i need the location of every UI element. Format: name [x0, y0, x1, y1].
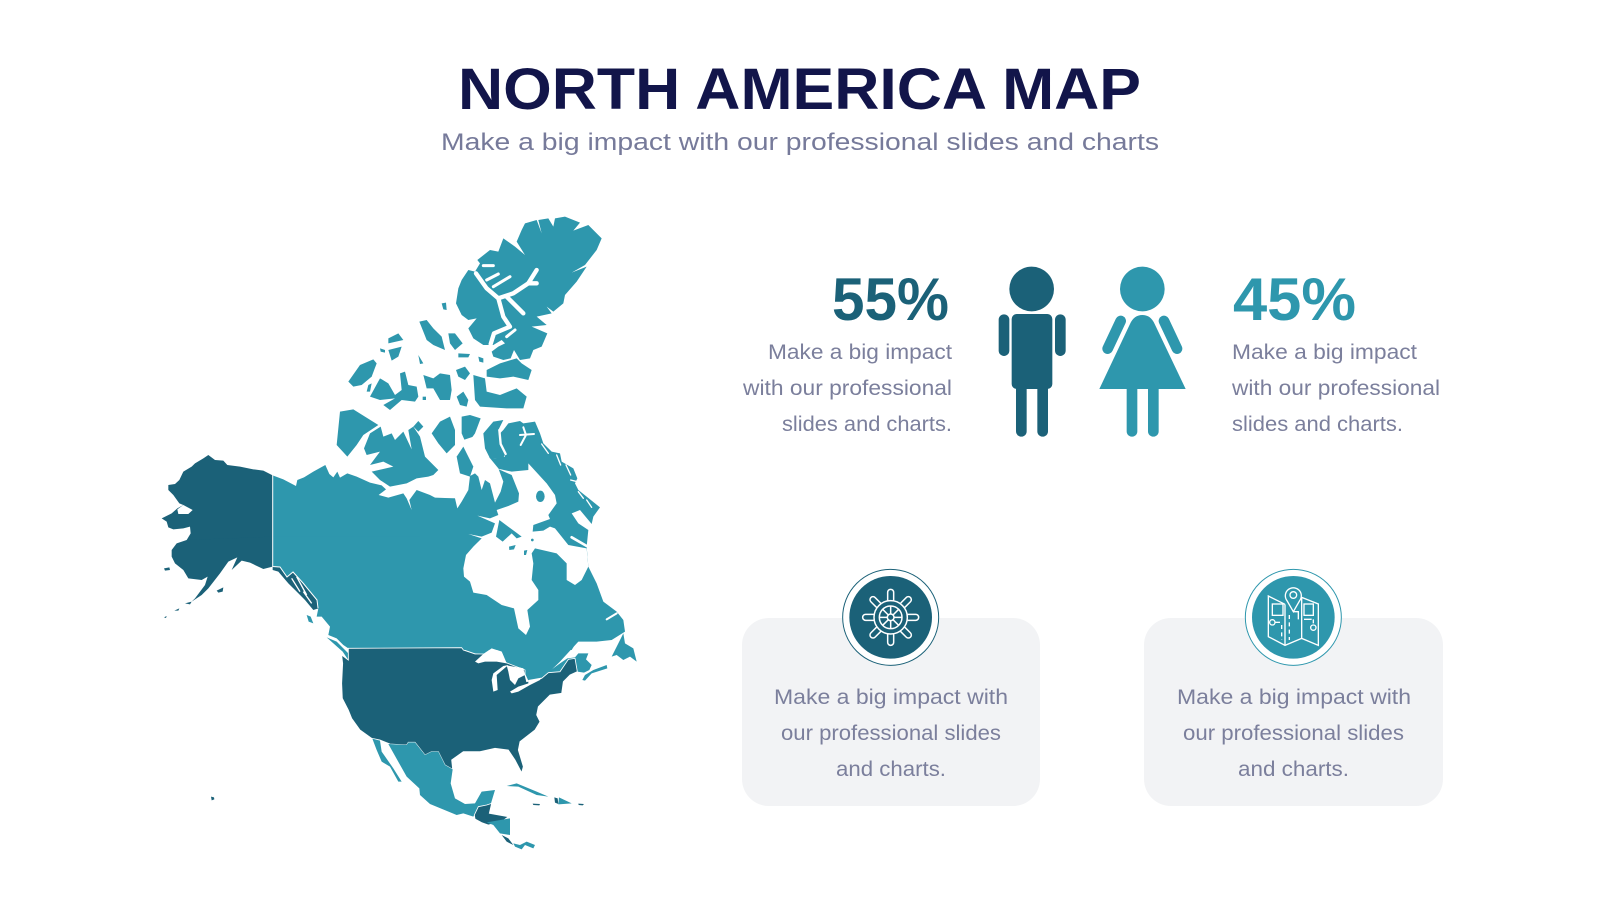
- description: slides and charts.: [782, 413, 952, 436]
- card background: [742, 618, 1040, 806]
- title: NORTH AMERICA MAP: [458, 57, 1141, 122]
- icon: ship wheel: [843, 569, 939, 665]
- map region: Mexico and Central America: [211, 739, 584, 849]
- map detail: Baffin, Hudson Bay and Quebec: [420, 420, 625, 650]
- card text: [1177, 686, 1411, 781]
- icon: man: [999, 267, 1066, 437]
- map detail: Great Lakes: [475, 648, 542, 693]
- map border: Alaska and Canada: [273, 475, 318, 608]
- icon: folded map with pin: [1245, 569, 1341, 665]
- statistic: 45%: [1231, 266, 1440, 436]
- map region: Canada: [273, 217, 637, 681]
- description: [742, 341, 952, 436]
- statistic: 55%: [742, 266, 952, 436]
- value: 45%: [1233, 266, 1356, 333]
- map: North America: [162, 217, 637, 849]
- card text: our professional slides: [781, 722, 1001, 745]
- description: slides and charts.: [1232, 413, 1403, 436]
- icon: woman: [1099, 267, 1186, 437]
- card text: our professional slides: [1183, 722, 1404, 745]
- panel: right card: [1144, 569, 1443, 806]
- map detail: Caribbean islands: [507, 783, 584, 805]
- map detail: Hawaii: [211, 797, 214, 800]
- card text: Make a big impact with: [1177, 686, 1411, 709]
- value: 55%: [832, 266, 949, 333]
- card text: and charts.: [836, 758, 946, 781]
- description: with our professional: [1231, 377, 1440, 400]
- description: Make a big impact: [1232, 341, 1417, 364]
- description: Make a big impact: [768, 341, 952, 364]
- map detail: northern fjords: [476, 266, 537, 344]
- subtitle: Make a big impact with our professional slides and charts: [441, 129, 1159, 156]
- card text: [774, 686, 1008, 781]
- card text: and charts.: [1238, 758, 1349, 781]
- description: [1231, 341, 1440, 436]
- card background: [1144, 618, 1443, 806]
- description: with our professional: [742, 377, 952, 400]
- map detail: Vancouver Island: [327, 637, 348, 660]
- map detail: Maritimes and Newfoundland: [547, 633, 637, 681]
- panel: left card: [742, 569, 1040, 806]
- map region: Alaska: [162, 455, 318, 618]
- map region: contiguous United States: [342, 648, 577, 773]
- card text: Make a big impact with: [774, 686, 1008, 709]
